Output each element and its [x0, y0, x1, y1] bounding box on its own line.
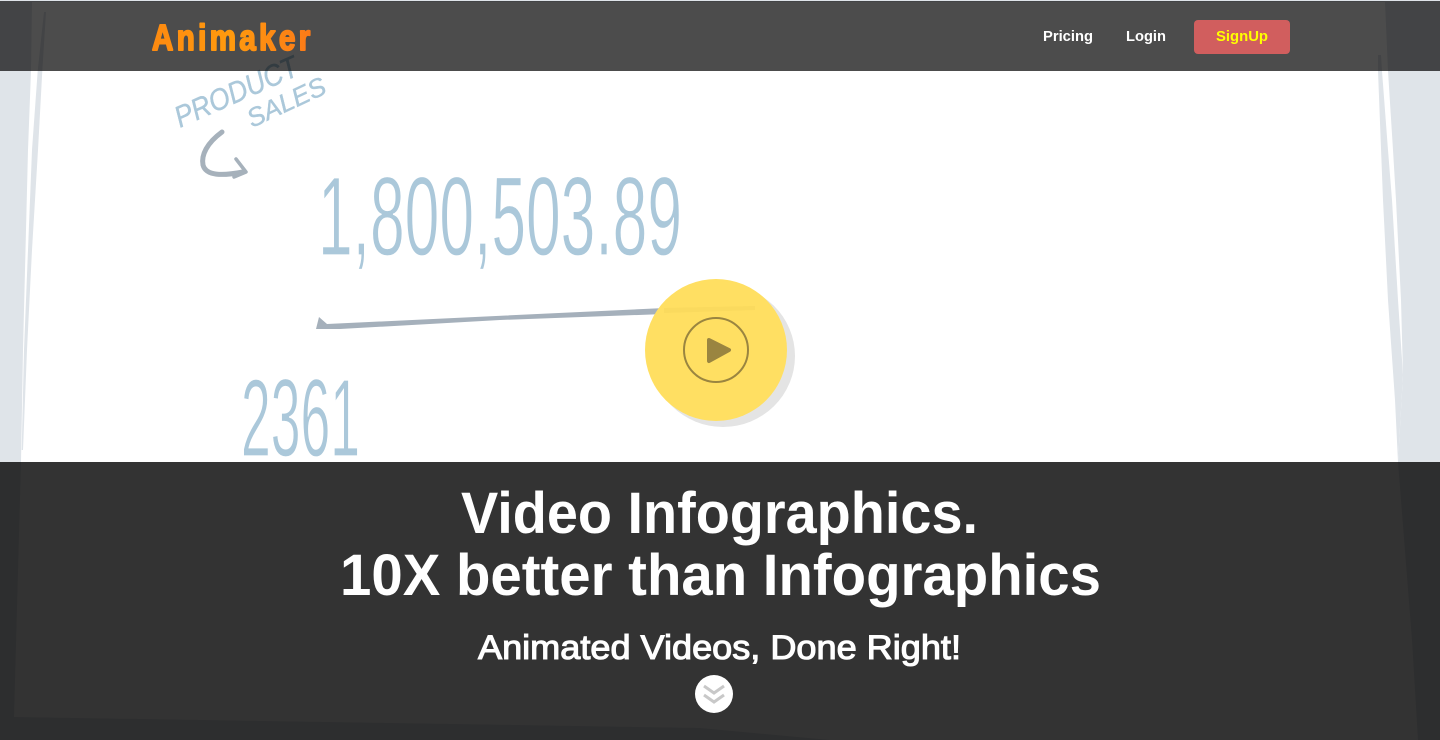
button: sign up: SignUp [1216, 28, 1268, 45]
text: large sales figure: 1,800,503.89 [318, 154, 682, 279]
button: sign up [1194, 20, 1290, 54]
nav link: pricing: Pricing [1043, 28, 1093, 45]
heading line 2: 10X better than Infographics [340, 543, 1101, 608]
panel: video frame [169, 50, 682, 480]
logo: Animaker [152, 17, 310, 58]
text: product sales note: PRODUCT [169, 50, 306, 134]
panel: headline band [0, 462, 1440, 740]
icon: curved arrow [203, 132, 246, 177]
panel: video frame: 2361 [241, 357, 360, 480]
panel: navigation bar [0, 1, 1440, 71]
icon: play button [645, 279, 795, 427]
chart: progress line [316, 308, 665, 329]
subheading: Animated Videos, Done Right! [478, 629, 961, 667]
heading line 1: Video Infographics. [461, 481, 978, 546]
text: product sales note: SALES [242, 70, 331, 133]
nav link: login: Login [1126, 28, 1166, 45]
icon: scroll down chevrons [695, 675, 733, 713]
